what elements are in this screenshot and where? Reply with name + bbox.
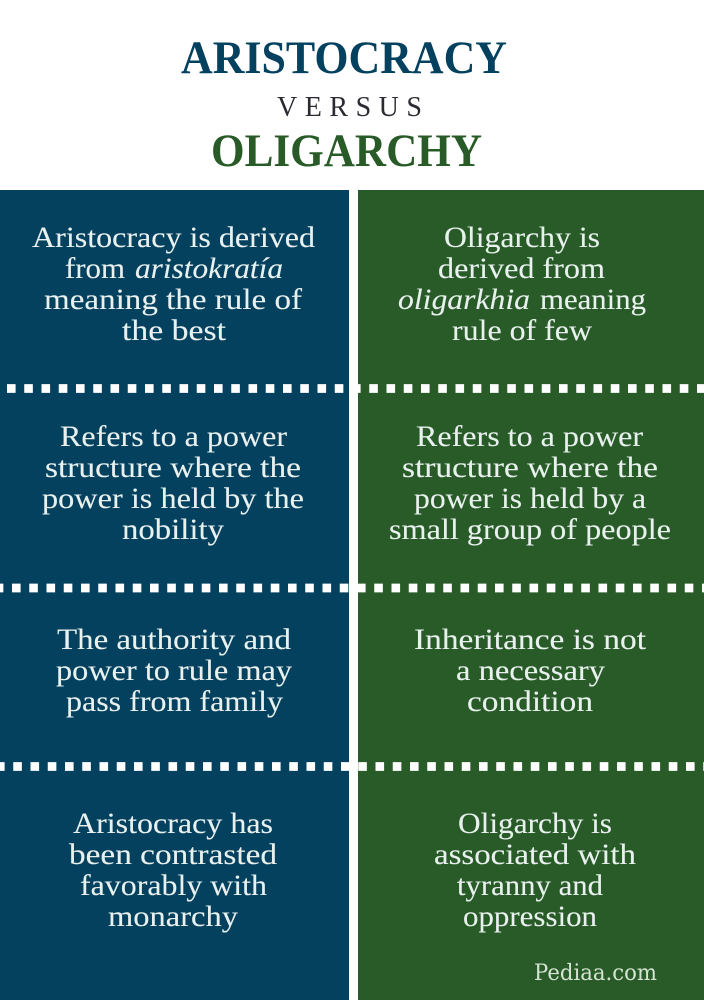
- oligarchy: etymology: meaning: [540, 283, 646, 316]
- aristocracy: inheritance: power to rule may: [56, 654, 292, 687]
- aristocracy: power structure: nobility: [122, 513, 224, 546]
- oligarchy: inheritance: a necessary: [456, 654, 605, 687]
- oligarchy: power structure: small group of people: [389, 513, 671, 546]
- footer: Pediaa.com logo: Pediaa.com: [534, 961, 657, 986]
- oligarchy: power structure: power is held by a: [414, 482, 646, 515]
- aristocracy: inheritance: The authority and: [57, 623, 291, 656]
- oligarchy: association: associated with: [434, 838, 636, 871]
- oligarchy: inheritance: condition: [467, 685, 593, 718]
- oligarchy: etymology: Oligarchy is: [444, 221, 600, 254]
- aristocracy: power structure: structure where the: [45, 451, 301, 484]
- aristocracy: contrast: been contrasted: [69, 838, 277, 871]
- title: Aristocracy: ARISTOCRACY: [181, 32, 507, 84]
- aristocracy: etymology: the best: [122, 314, 227, 347]
- oligarchy: power structure: [389, 420, 671, 546]
- aristocracy: etymology: Aristocracy is derived: [32, 221, 315, 254]
- oligarchy: etymology: oligarkhia: [398, 283, 530, 316]
- aristocracy: contrast: favorably with: [80, 869, 267, 902]
- aristocracy: contrast: [69, 807, 277, 933]
- oligarchy: association: oppression: [463, 900, 597, 933]
- aristocracy: power structure: Refers to a power: [60, 420, 287, 453]
- title: Oligarchy: OLIGARCHY: [211, 125, 482, 177]
- panel: oligarchy column: [358, 190, 704, 1000]
- panel: aristocracy column: [0, 190, 349, 1000]
- oligarchy: etymology: rule of few: [452, 314, 592, 347]
- oligarchy: power structure: structure where the: [402, 451, 658, 484]
- aristocracy: inheritance: [56, 623, 292, 718]
- row divider 1: [7, 384, 704, 393]
- aristocracy: power structure: power is held by the: [42, 482, 304, 515]
- aristocracy: contrast: monarchy: [108, 900, 238, 933]
- oligarchy: association: Oligarchy is: [458, 807, 612, 840]
- oligarchy: association: [434, 807, 636, 933]
- oligarchy: power structure: Refers to a power: [416, 420, 643, 453]
- aristocracy: etymology: from: [65, 252, 125, 285]
- row divider 2: [0, 584, 704, 592]
- oligarchy: inheritance: Inheritance is not: [414, 623, 647, 656]
- aristocracy: etymology: meaning the rule of: [44, 283, 302, 316]
- title block: [181, 32, 507, 177]
- row divider 3: [0, 762, 704, 771]
- oligarchy: inheritance: [414, 623, 647, 718]
- oligarchy: etymology: derived from: [438, 252, 605, 285]
- title: versus: VERSUS: [277, 92, 422, 123]
- aristocracy: power structure: [42, 420, 304, 546]
- oligarchy: association: tyranny and: [457, 869, 603, 902]
- oligarchy: etymology: [398, 221, 646, 347]
- aristocracy: etymology: aristokratía: [135, 252, 283, 285]
- aristocracy: inheritance: pass from family: [66, 685, 283, 718]
- aristocracy: contrast: Aristocracy has: [73, 807, 273, 840]
- aristocracy: etymology: [32, 221, 315, 347]
